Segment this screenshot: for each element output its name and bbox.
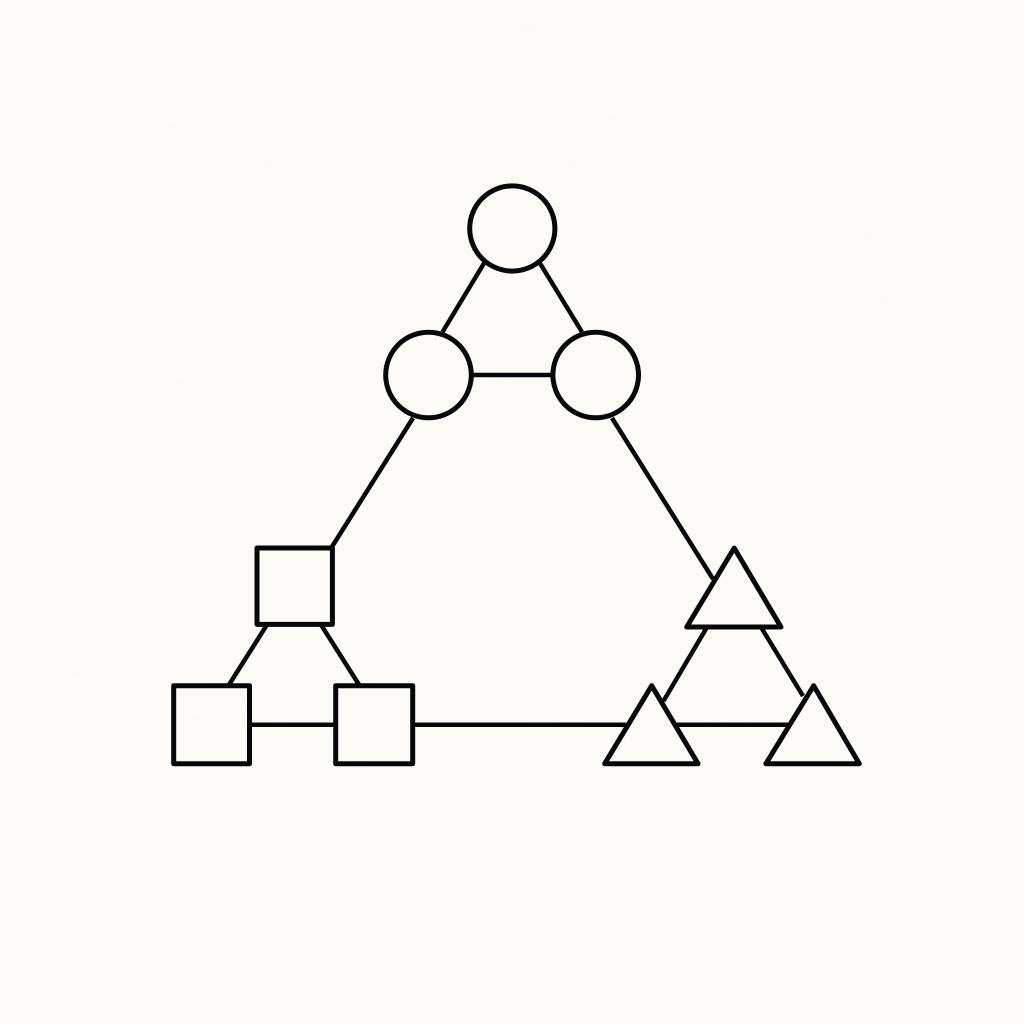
triangle: bottom left bbox=[605, 686, 698, 764]
circle: top bbox=[470, 186, 555, 271]
circle: left bbox=[386, 332, 471, 418]
triangle: bottom right bbox=[766, 686, 859, 764]
triangle: top bbox=[687, 548, 781, 627]
square: bottom left bbox=[174, 686, 250, 764]
square: top bbox=[257, 548, 332, 624]
square: bottom right bbox=[336, 686, 413, 764]
circle: right bbox=[553, 332, 638, 418]
connector lines bbox=[228, 262, 803, 725]
